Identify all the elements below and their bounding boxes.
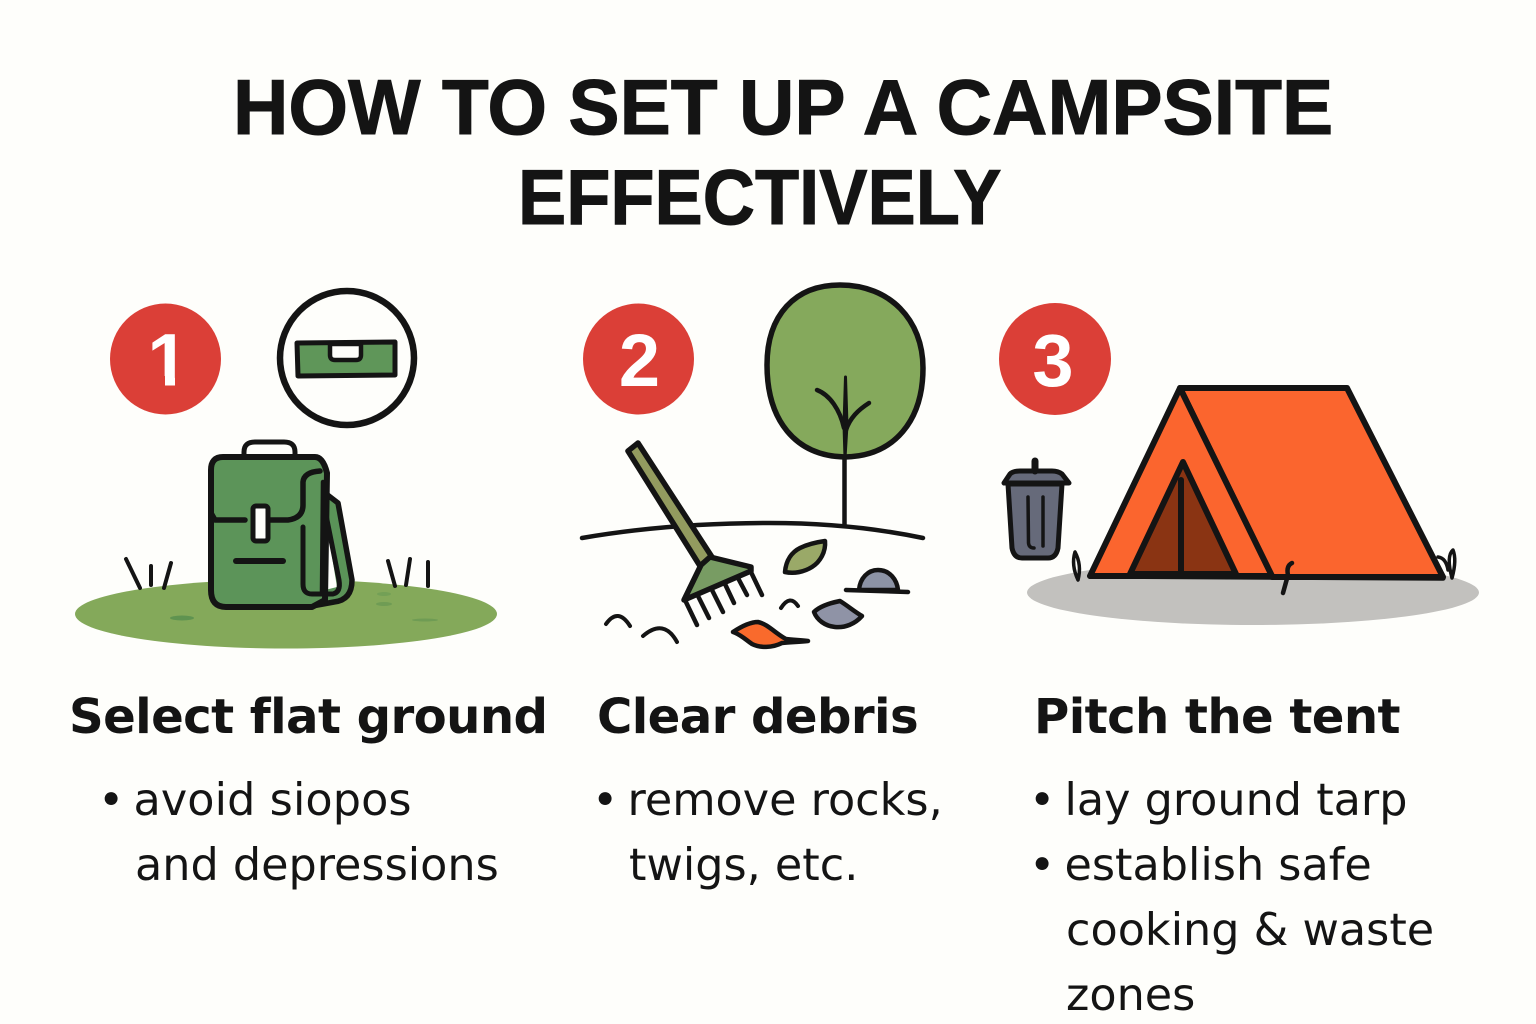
badge 3 <box>999 303 1111 415</box>
text: step 3 bullets: • <box>1029 775 1055 826</box>
title: HOW TO SET UP A CAMPSITE <box>233 63 1333 151</box>
text: step 2 bullets <box>592 775 943 891</box>
text: step 3 bullets: lay ground tarp <box>1064 775 1407 826</box>
icon: tent on gravel <box>1027 388 1479 625</box>
badge 1: 1 <box>147 318 189 402</box>
heading: step 3: Pitch the tent <box>1034 689 1400 745</box>
heading: step 1: Select flat ground <box>69 689 547 745</box>
icon: trash can <box>1004 461 1069 558</box>
badge 1 <box>110 304 221 414</box>
text: step 3 bullets <box>1029 775 1434 1021</box>
badge 3: 3 <box>1032 319 1074 402</box>
ground line <box>582 523 923 538</box>
heading: step 2: Clear debris <box>597 689 918 745</box>
text: step 1 bullets <box>98 775 499 891</box>
badge 2 <box>583 304 694 414</box>
badge 2: 2 <box>619 319 660 402</box>
icon: rake and debris <box>606 443 908 647</box>
text: step 1 bullets: avoid siopos <box>134 775 412 826</box>
text: step 3 bullets: • <box>1029 840 1055 891</box>
text: step 1 bullets: • <box>98 775 124 826</box>
title <box>233 63 1333 241</box>
text: step 3 bullets: establish safe <box>1064 840 1372 891</box>
icon: backpack on grass <box>75 442 497 648</box>
text: step 2 bullets: • <box>592 775 618 826</box>
text: step 3 bullets: zones <box>1066 970 1195 1021</box>
icon: spirit level <box>280 291 414 425</box>
text: step 2 bullets: remove rocks, <box>628 775 943 826</box>
title: EFFECTIVELY <box>518 153 1001 241</box>
text: step 3 bullets: cooking & waste <box>1066 905 1434 956</box>
text: step 2 bullets: twigs, etc. <box>629 840 858 891</box>
text: step 1 bullets: and depressions <box>135 840 499 891</box>
icon: tree <box>767 285 923 525</box>
